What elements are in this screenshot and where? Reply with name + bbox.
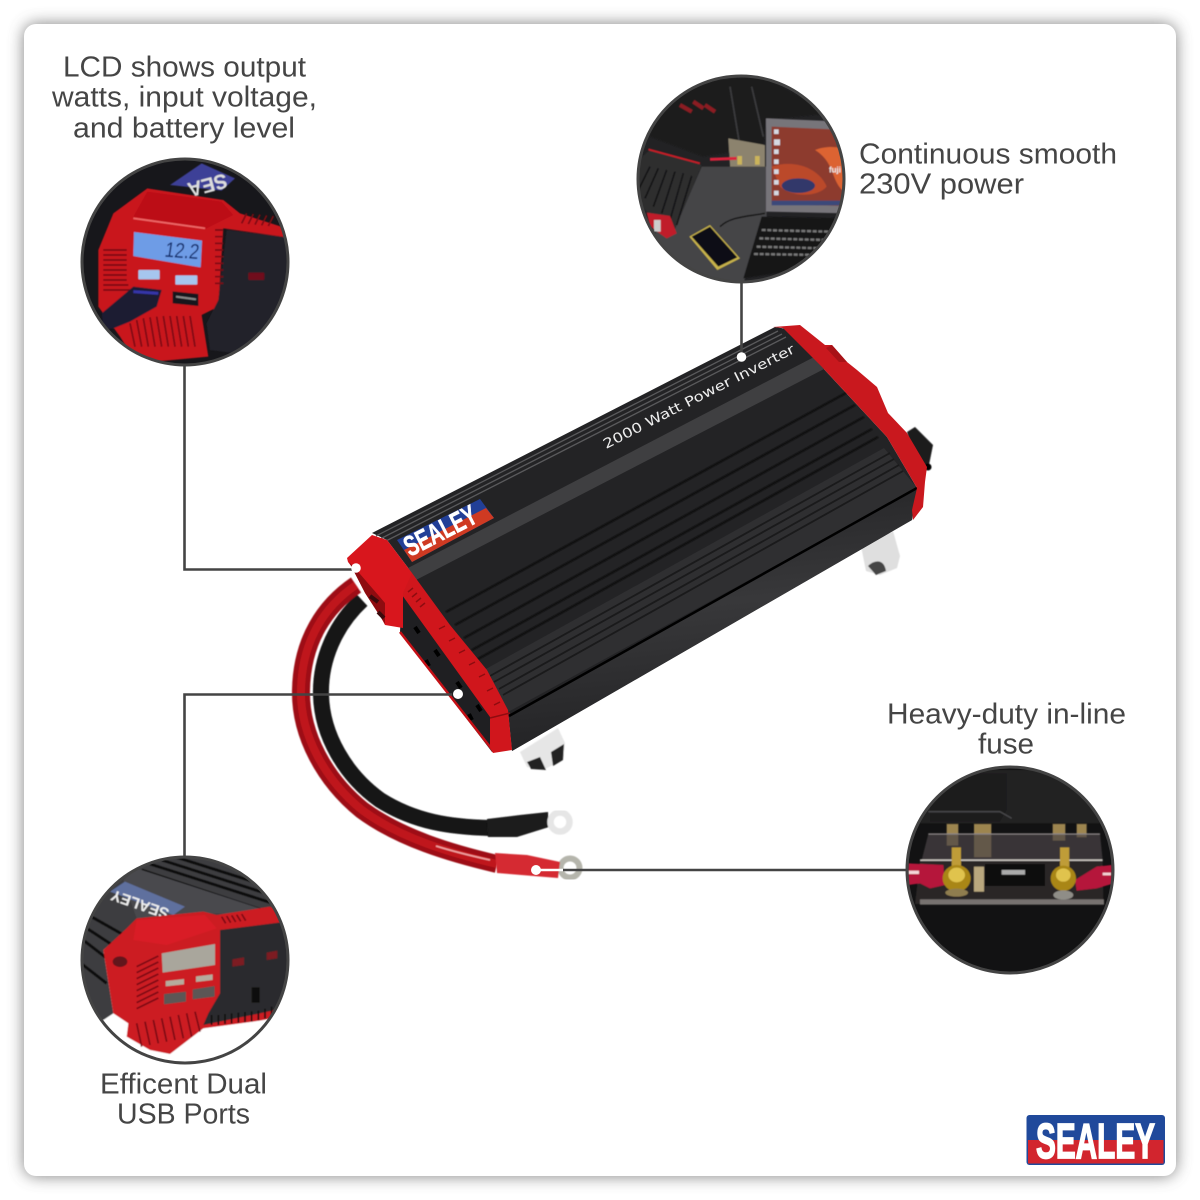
cables (301, 585, 497, 864)
inverter in photo (637, 149, 702, 238)
usb ports (164, 992, 186, 1004)
lower casing face (509, 488, 917, 751)
laptop screen: fuji (829, 166, 841, 175)
laptop screen (766, 118, 847, 213)
lower fins (490, 453, 903, 695)
line to usb callout (184, 694, 452, 858)
socket face (207, 230, 287, 353)
rear fuse studs (947, 824, 1087, 857)
laptop keyboard (743, 216, 834, 278)
car boot background (650, 77, 830, 157)
label: power: Continuous smooth (859, 138, 1117, 170)
callout: LCD photo: 12.2 (163, 238, 201, 264)
callout: USB ports photo (77, 850, 293, 1070)
brass nuts (943, 847, 1076, 900)
label: USB: Efficent Dual (100, 1068, 267, 1100)
red housing (98, 188, 287, 363)
line to lcd callout (184, 365, 352, 570)
mounting bracket right (861, 531, 900, 575)
vents (103, 213, 273, 347)
callout: USB ports photo: SEALEY (109, 886, 171, 922)
dark housing (920, 770, 1113, 823)
casing background (84, 858, 273, 1020)
leader lines (184, 283, 906, 870)
phone (689, 225, 740, 270)
usb port (173, 291, 198, 306)
side fins (446, 393, 878, 659)
red cable lug (495, 853, 580, 878)
light stripe (408, 356, 826, 580)
callout: laptop and phone photo (637, 75, 847, 283)
rear red cap (773, 325, 927, 520)
trim notches (439, 626, 510, 718)
line to power callout (740, 283, 743, 356)
label: power (859, 138, 1117, 200)
label: power: 230V power (859, 168, 1025, 200)
car mat floor (650, 167, 767, 283)
leader dots (351, 352, 746, 875)
red housing (103, 907, 290, 1054)
lcd side (349, 562, 385, 624)
label: USB: USB Ports (117, 1098, 250, 1130)
red cable highlight (436, 846, 490, 860)
top face and badge (124, 870, 260, 918)
label: fuse (887, 698, 1126, 760)
casing badge (170, 163, 235, 201)
label: USB (100, 1068, 267, 1130)
mounting bracket left (520, 728, 565, 770)
main black casing (372, 327, 917, 751)
red terminals (908, 863, 1112, 891)
line to fuse callout (563, 869, 906, 871)
black battery cable (321, 600, 490, 828)
lighter lower band (484, 448, 917, 712)
label: LCD (51, 52, 317, 144)
socket panel (400, 590, 505, 752)
in-line fuse in photo (710, 138, 765, 167)
casing badge: SEA (185, 169, 230, 201)
fuse block (915, 861, 1103, 904)
product name: 2000 Watt Power Inverter (601, 341, 798, 453)
usb indicators (138, 270, 160, 279)
label: LCD: watts, input voltage, (51, 82, 317, 114)
vents (137, 914, 246, 1047)
casing fins (84, 858, 270, 984)
black cable lug (487, 812, 570, 837)
red cable core shade (301, 585, 497, 864)
usb plug and cable (102, 287, 162, 330)
usb indicators (166, 979, 184, 986)
label: LCD: and battery level (73, 112, 295, 144)
vent on socket trim (408, 588, 425, 607)
white ground (102, 1012, 268, 1054)
rear fin lines (376, 331, 786, 542)
sealey badge on casing: SEALEY (399, 500, 483, 563)
front red trim (402, 573, 512, 753)
label: fuse: fuse (978, 728, 1034, 760)
red battery cable (301, 585, 497, 864)
casing dark seam (509, 488, 917, 716)
lcd screen (133, 232, 202, 267)
lcd screen (162, 944, 215, 973)
front red cap (347, 535, 412, 628)
clear cover (922, 834, 1103, 860)
label: LCD: LCD shows output (63, 52, 306, 84)
callout: LCD photo (81, 158, 289, 366)
callout: fuse photo (906, 766, 1114, 974)
label: fuse: Heavy-duty in-line (887, 698, 1126, 730)
inverter body (347, 325, 927, 753)
socket face (203, 922, 290, 1025)
switch on rear cap (907, 427, 933, 470)
